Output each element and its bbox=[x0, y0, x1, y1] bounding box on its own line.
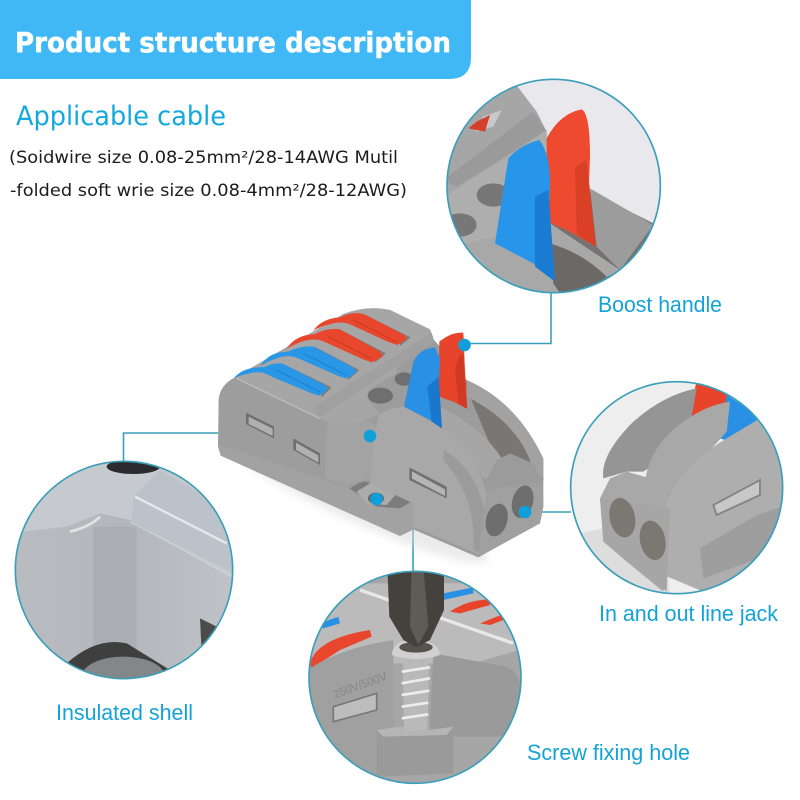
top face bbox=[235, 308, 434, 427]
label: screw fixing hole: Screw fixing hole bbox=[527, 740, 690, 765]
slot bbox=[475, 110, 502, 132]
blue handle bbox=[495, 140, 555, 282]
screw bbox=[403, 660, 429, 730]
front face bbox=[370, 407, 490, 555]
title: Product structure description bbox=[15, 26, 451, 59]
label: in and out line jack: In and out line jack bbox=[599, 601, 779, 626]
detail circle: boost handle bbox=[446, 78, 662, 294]
product: connector main view bbox=[218, 308, 543, 579]
detail circle: screw fixing hole: 250V/500V bbox=[332, 671, 389, 701]
holes bbox=[368, 388, 393, 404]
side windows bbox=[246, 413, 274, 438]
cable specification text bbox=[9, 148, 407, 200]
title banner bbox=[0, 0, 471, 79]
detail circle: insulated shell bbox=[14, 460, 234, 680]
marker dots bbox=[364, 339, 531, 518]
blue handle bbox=[404, 347, 442, 428]
screw hole bbox=[357, 483, 397, 505]
cable specification text: (Soidwire size 0.08-25mm²/28-14AWG Mutil bbox=[9, 148, 398, 167]
left side face bbox=[219, 377, 375, 487]
side panel bbox=[311, 640, 394, 668]
cable specification text: -folded soft wrie size 0.08-4mm²/28-12AWG) bbox=[10, 181, 407, 200]
front window bbox=[409, 467, 447, 498]
front bbox=[600, 472, 674, 592]
detail circle: line jack bbox=[570, 375, 787, 598]
screwdriver bbox=[387, 567, 444, 647]
plate bbox=[448, 86, 546, 194]
label: insulated shell: Insulated shell bbox=[56, 700, 193, 725]
right block arcs bbox=[463, 380, 543, 480]
arcs bbox=[603, 388, 697, 478]
label: boost handle: Boost handle bbox=[598, 292, 722, 317]
red handle bbox=[439, 333, 467, 409]
detail circle: screw fixing hole bbox=[300, 567, 530, 787]
body silhouette bbox=[218, 308, 543, 557]
red handle bbox=[547, 109, 596, 247]
post bbox=[377, 734, 453, 776]
applicable cable heading: Applicable cable bbox=[16, 101, 226, 132]
leader lines bbox=[124, 293, 571, 572]
base plate bbox=[219, 444, 413, 536]
jacks face bbox=[478, 482, 543, 557]
slot shadows bbox=[283, 364, 332, 397]
levers bbox=[234, 363, 327, 396]
shell highlight bbox=[237, 378, 319, 418]
